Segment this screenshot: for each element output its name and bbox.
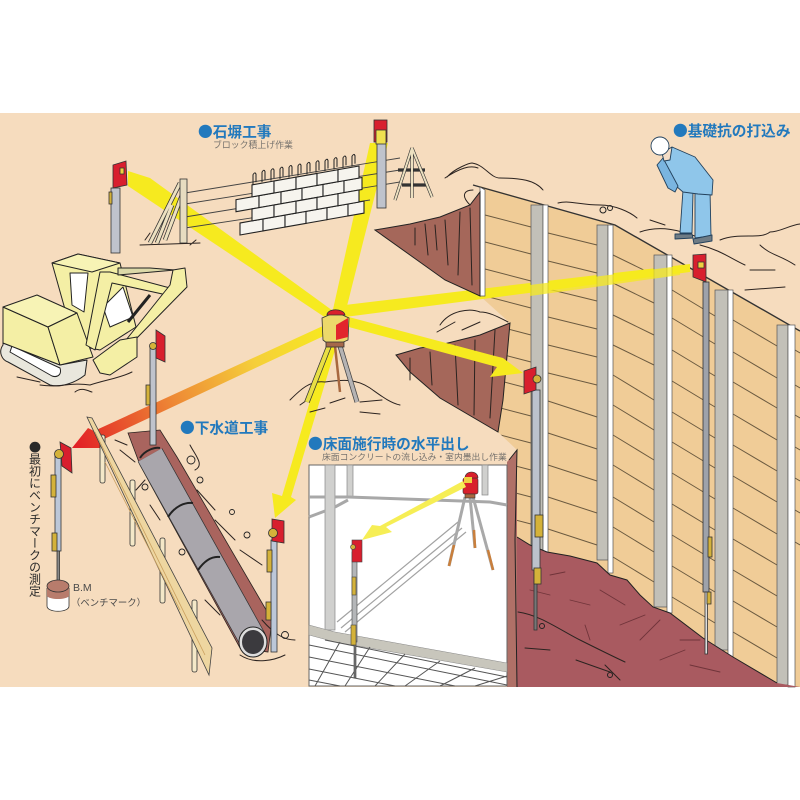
heading: floor levelling	[308, 433, 507, 462]
panel beam arrow	[362, 481, 466, 540]
steel wall posts	[480, 187, 795, 687]
arrow: gradient beam to benchmark	[72, 325, 328, 448]
label: B.M: B.M	[73, 582, 92, 594]
laser beams	[128, 143, 388, 322]
lower cliff and strip	[396, 323, 517, 687]
laser beam behind posts	[345, 264, 690, 317]
panel tripod	[449, 497, 493, 570]
block wall	[236, 153, 364, 236]
laser instrument	[322, 310, 349, 347]
arrow: beam to sewer receiver	[272, 340, 338, 518]
panel laser	[463, 472, 478, 498]
label: B.M	[71, 582, 146, 608]
receiver pole: top left	[109, 161, 127, 253]
benchmark block	[47, 580, 69, 611]
receiver pole: wall right	[693, 254, 712, 654]
heading: floor levelling: 床面コンクリートの流し込み・室内墨出し作業	[322, 451, 507, 462]
tripod mound	[290, 380, 400, 414]
pipe	[140, 448, 267, 657]
panel frame	[309, 465, 507, 672]
soil on upper ground	[437, 163, 800, 332]
excavator track	[1, 343, 87, 386]
excavator	[1, 254, 187, 386]
heading: stone wall work: ブロック積上げ作業	[213, 139, 293, 150]
receiver pole: benchmark	[51, 442, 72, 586]
vertical note: benchmark measurement: ●最初にベンチマークの測定	[26, 441, 44, 598]
background panel	[0, 113, 800, 687]
excavator dirt	[17, 372, 132, 392]
retaining wall	[473, 185, 800, 687]
label: B.M: （ベンチマーク）	[71, 597, 146, 608]
wooden stakes	[100, 435, 197, 672]
worker	[651, 137, 713, 244]
heading: foundation pile: ●基礎抗の打込み	[673, 120, 791, 141]
heading: sewer work: ●下水道工事	[180, 417, 268, 438]
translucent beam over posts	[530, 266, 680, 296]
panel pole	[350, 540, 362, 678]
panel floor tiles	[309, 640, 507, 686]
ground at wall base	[517, 537, 800, 687]
fence	[140, 148, 432, 245]
tripod	[307, 346, 357, 402]
heading: stone wall work	[198, 121, 293, 150]
wooden board	[87, 417, 212, 675]
sewer pipe trench	[115, 430, 295, 661]
receiver pole: excavator	[146, 330, 165, 445]
excavator boom	[86, 268, 187, 375]
receiver pole: sewer	[266, 519, 284, 652]
receiver pole: wall centre	[524, 367, 543, 630]
heading: floor levelling: ●床面施行時の水平出し	[308, 433, 470, 454]
panel: floor levelling	[309, 465, 507, 686]
arrow: beam to right receiver	[345, 316, 523, 377]
receiver pole: block wall	[374, 120, 387, 208]
upper cliff	[375, 192, 480, 296]
heading: stone wall work: ●石塀工事	[198, 121, 272, 142]
